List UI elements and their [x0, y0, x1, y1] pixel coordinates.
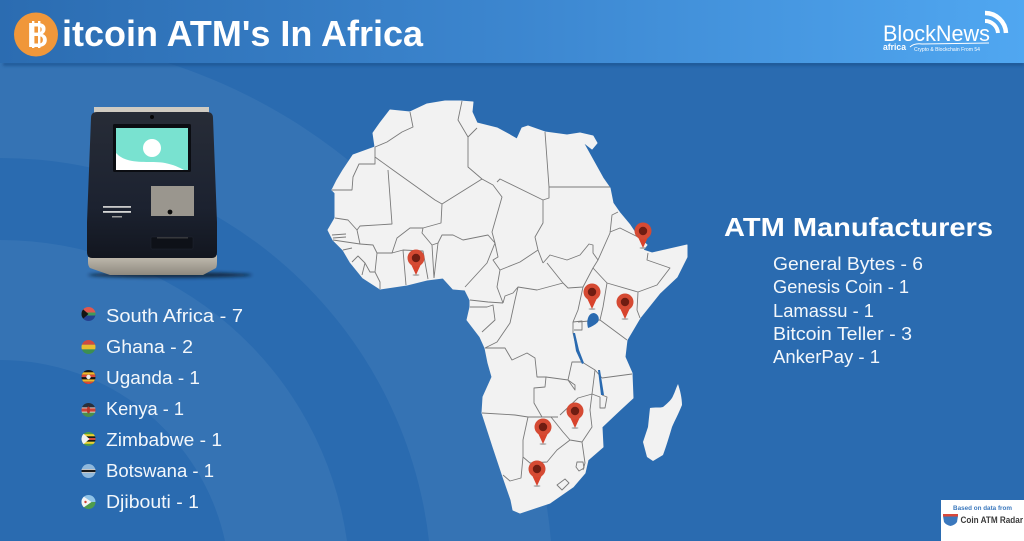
text: Genesis Coin: Genesis Coin - 1 — [773, 277, 909, 297]
pin: Djibouti — [634, 222, 652, 249]
pin: South Africa — [528, 460, 546, 487]
text: Uganda: Uganda - 1 — [106, 368, 200, 388]
icon: bitcoin coin: B — [27, 16, 48, 54]
pin: Uganda — [584, 284, 600, 310]
header bar — [0, 0, 1024, 66]
pin: Kenya — [616, 294, 634, 320]
source badge: Coin ATM Radar — [941, 500, 1024, 541]
flag: Zimbabwe — [82, 432, 96, 446]
text: General Bytes: General Bytes - 6 — [773, 254, 923, 274]
panel: ATM manufacturers — [724, 212, 993, 367]
flag: Kenya — [82, 403, 96, 417]
heading: ATM Manufacturers — [724, 212, 993, 242]
text: Botswana: Botswana - 1 — [106, 461, 214, 481]
logo: BlockNews Africa: BlockNews — [883, 21, 990, 46]
text: South Africa: South Africa - 7 — [106, 306, 243, 326]
pin: Zimbabwe — [566, 402, 584, 429]
logo: BlockNews Africa — [883, 13, 1006, 53]
icon: bitcoin coin — [14, 12, 58, 56]
flag: Uganda — [82, 370, 96, 384]
text: Lamassu: Lamassu - 1 — [773, 301, 874, 321]
text: Djibouti: Djibouti - 1 — [106, 492, 199, 512]
country list — [82, 306, 243, 512]
source badge: Coin ATM Radar: Based on data from — [953, 505, 1012, 512]
logo: BlockNews Africa: Crypto & Blockchain From 54 — [914, 47, 980, 53]
flag: Botswana — [82, 464, 96, 478]
text: Kenya: Kenya - 1 — [106, 399, 184, 419]
title: itcoin ATM's In Africa — [62, 13, 424, 54]
illustration: bitcoin ATM — [87, 107, 252, 278]
pin: Ghana — [408, 250, 424, 276]
text: Zimbabwe: Zimbabwe - 1 — [106, 430, 222, 450]
text: AnkerPay: AnkerPay - 1 — [773, 347, 880, 367]
text: Bitcoin Teller: Bitcoin Teller - 3 — [773, 324, 912, 344]
mainland and borders — [328, 101, 687, 513]
flag: Ghana — [82, 340, 96, 354]
map of Africa — [328, 101, 687, 513]
text: Ghana: Ghana - 2 — [106, 337, 193, 357]
pin: Botswana — [534, 418, 552, 445]
logo: BlockNews Africa: africa — [883, 42, 907, 52]
flag: South Africa — [82, 307, 96, 321]
flag: Djibouti — [82, 495, 96, 509]
